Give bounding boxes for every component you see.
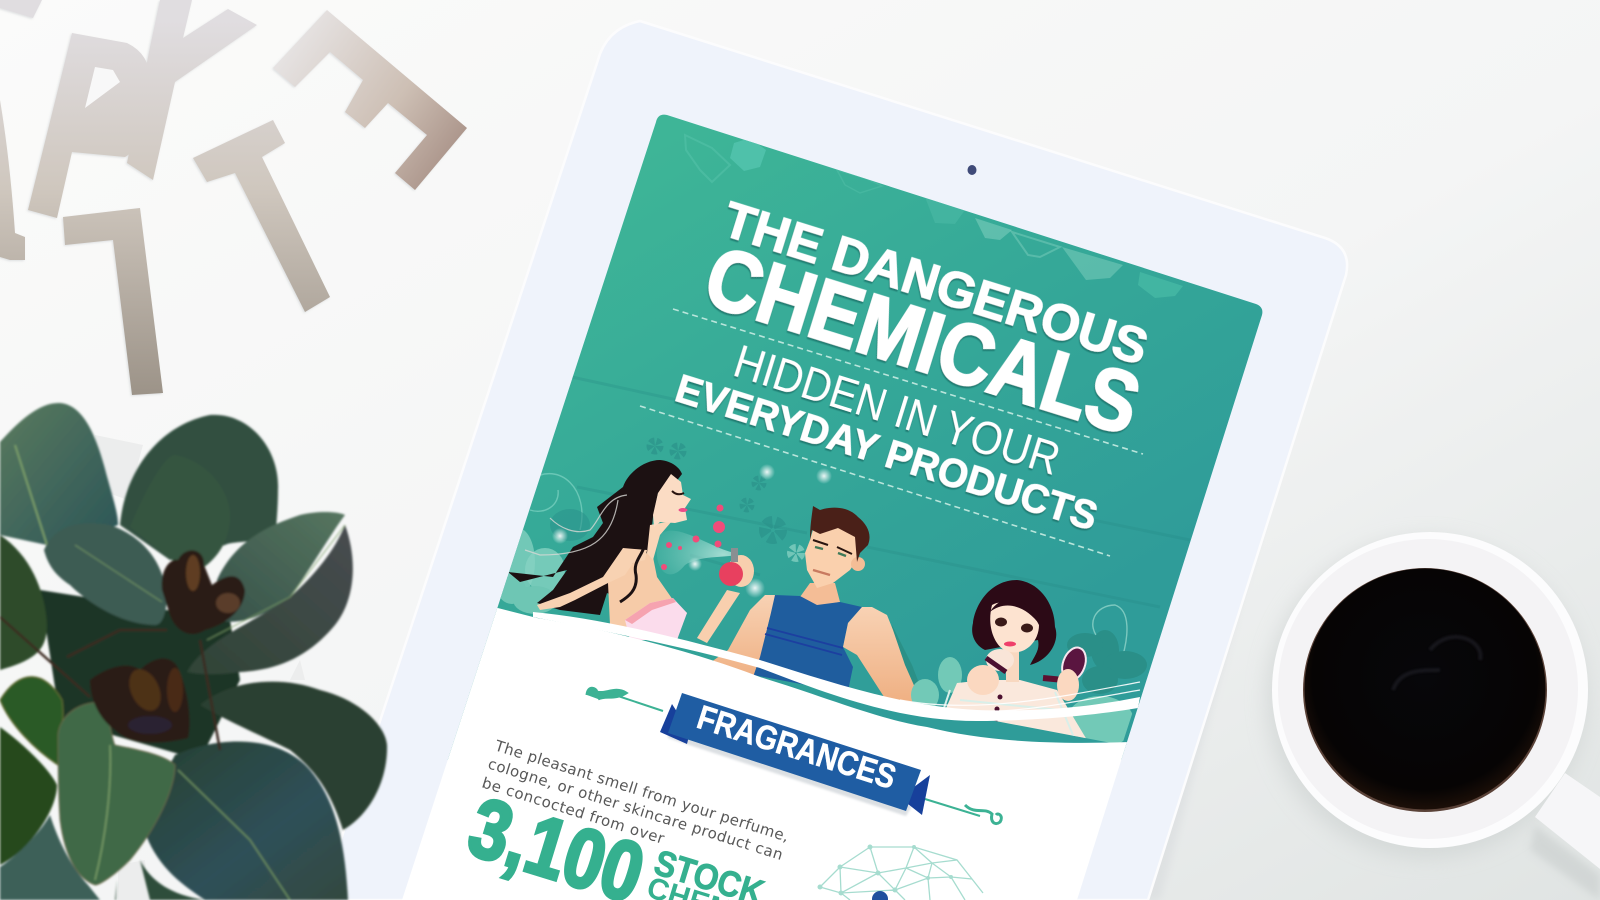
title line: CHEMICALS: CHEMICALS <box>694 228 1151 453</box>
neck <box>647 521 672 560</box>
seed pods lower <box>90 658 190 743</box>
letter seven shape <box>63 208 163 395</box>
pink top <box>625 598 687 640</box>
centre bottom leaf <box>140 741 348 900</box>
letter P <box>28 33 150 218</box>
closed eye <box>672 491 684 494</box>
white wave ribbon <box>533 612 1140 721</box>
floral decorations left <box>500 438 832 614</box>
loose hair strands <box>525 495 627 555</box>
right pale leaf <box>217 512 345 622</box>
dashed divider bottom <box>640 406 1110 556</box>
small bright leaf <box>0 677 63 765</box>
cup inner wall <box>1278 539 1578 839</box>
right dark leaf <box>187 525 353 674</box>
buttons <box>992 694 1002 724</box>
cup outer rim <box>1272 532 1588 848</box>
intro paragraph <box>480 736 791 864</box>
top left leaf <box>0 403 118 545</box>
raising hand <box>967 665 999 695</box>
seed pods upper <box>162 550 245 634</box>
black flowing hair <box>508 460 682 615</box>
title line: EVERYDAY PRODUCTS: EVERYDAY PRODUCTS <box>670 367 1103 539</box>
ribbon banner <box>668 693 921 811</box>
tank top <box>754 595 862 688</box>
sparkles <box>552 464 832 598</box>
compact <box>1043 644 1090 684</box>
blouse <box>930 680 1090 745</box>
woman with perfume <box>508 460 754 643</box>
tablet camera <box>968 165 976 175</box>
spray mist <box>657 531 735 574</box>
right arm shadow <box>892 626 918 685</box>
face <box>653 474 691 527</box>
thin wave lines <box>900 682 1140 712</box>
letter T <box>193 120 330 312</box>
face <box>805 523 857 588</box>
sleeve highlights <box>935 690 1075 740</box>
neck <box>1006 650 1019 682</box>
lower left leaf <box>0 815 100 900</box>
torso skin <box>608 553 687 633</box>
front hair strand <box>620 540 645 602</box>
title line: THE DANGEROUS: THE DANGEROUS <box>717 191 1154 376</box>
letter Y <box>127 0 257 180</box>
subtle background bands <box>572 376 734 518</box>
dashed divider top <box>673 309 1143 454</box>
paragraph line one: The pleasant smell from your perfume, <box>492 736 791 846</box>
left dark leaf <box>0 535 47 670</box>
tablet shadow <box>330 32 1335 900</box>
compact hand <box>1057 669 1079 701</box>
right low leaf <box>200 682 387 830</box>
letter P counter <box>85 67 120 108</box>
eyes brows mouth <box>813 540 852 554</box>
top left leaf vein <box>15 445 47 545</box>
arm skin <box>537 548 647 610</box>
centre bottom vein <box>178 770 290 900</box>
plant pot behind leaves <box>95 435 305 900</box>
left oval leaf <box>44 523 167 625</box>
face <box>990 602 1039 652</box>
title line: HIDDEN IN YOUR: HIDDEN IN YOUR <box>728 335 1066 485</box>
teal header background <box>448 114 1262 760</box>
dark centre of plant <box>40 590 240 760</box>
section ornament right <box>925 799 1001 824</box>
leaf vein <box>75 525 345 640</box>
infographic screen <box>380 100 1280 900</box>
hand <box>728 555 754 587</box>
sphere centre dot <box>872 891 888 900</box>
hair <box>810 506 870 562</box>
cup shadow <box>1266 538 1586 858</box>
cup handle shadow <box>1530 825 1600 900</box>
woman with compact <box>905 580 1147 748</box>
neck <box>800 583 840 606</box>
man in blue tank top <box>713 506 918 702</box>
front leaf vein <box>95 745 110 880</box>
paragraph line two: cologne, or other skincare product can <box>486 755 785 864</box>
paragraph line three: be concocted from over <box>480 774 667 848</box>
FRAGRANCES heading: FRAGRANCES <box>693 698 900 797</box>
hearts <box>661 504 725 570</box>
back top leaf <box>120 415 278 560</box>
illustration: characters and florals <box>498 442 1147 748</box>
right arm <box>843 607 914 702</box>
ear <box>851 557 865 571</box>
bottom stem leaves <box>115 860 205 900</box>
coffee reflection <box>1393 637 1480 690</box>
bottom left dark leaf <box>0 727 57 865</box>
silver paper letters <box>0 0 467 395</box>
tank stripes <box>765 628 843 655</box>
tablet body <box>321 21 1347 900</box>
front leaf <box>58 703 175 885</box>
coffee surface <box>1304 568 1546 810</box>
plant <box>0 403 387 900</box>
letter fragment top left <box>0 0 42 18</box>
coffee rim <box>1303 568 1547 812</box>
letter E <box>273 10 467 190</box>
cup handle <box>1535 773 1600 869</box>
left arm <box>713 595 777 675</box>
floral decorations right <box>905 605 1147 748</box>
eyes and lips <box>995 618 1033 646</box>
ribbon banner tails <box>660 704 930 815</box>
section ornament left <box>587 688 663 711</box>
perfume bottle <box>719 548 743 586</box>
twigs <box>0 617 220 750</box>
coffee cup <box>1272 532 1588 848</box>
ribbon shadow <box>668 728 912 816</box>
front middle leaf <box>130 455 230 570</box>
geodesic sphere graphic <box>818 844 983 900</box>
hair <box>972 580 1056 665</box>
letter Q fragment <box>0 100 25 260</box>
bangs <box>990 599 1040 625</box>
powder puff <box>986 649 1014 672</box>
white lower content area <box>390 606 1130 900</box>
skirt <box>958 726 1032 745</box>
decorative hexagons <box>685 135 1183 298</box>
lips <box>678 508 688 512</box>
perfume arm <box>697 590 740 643</box>
